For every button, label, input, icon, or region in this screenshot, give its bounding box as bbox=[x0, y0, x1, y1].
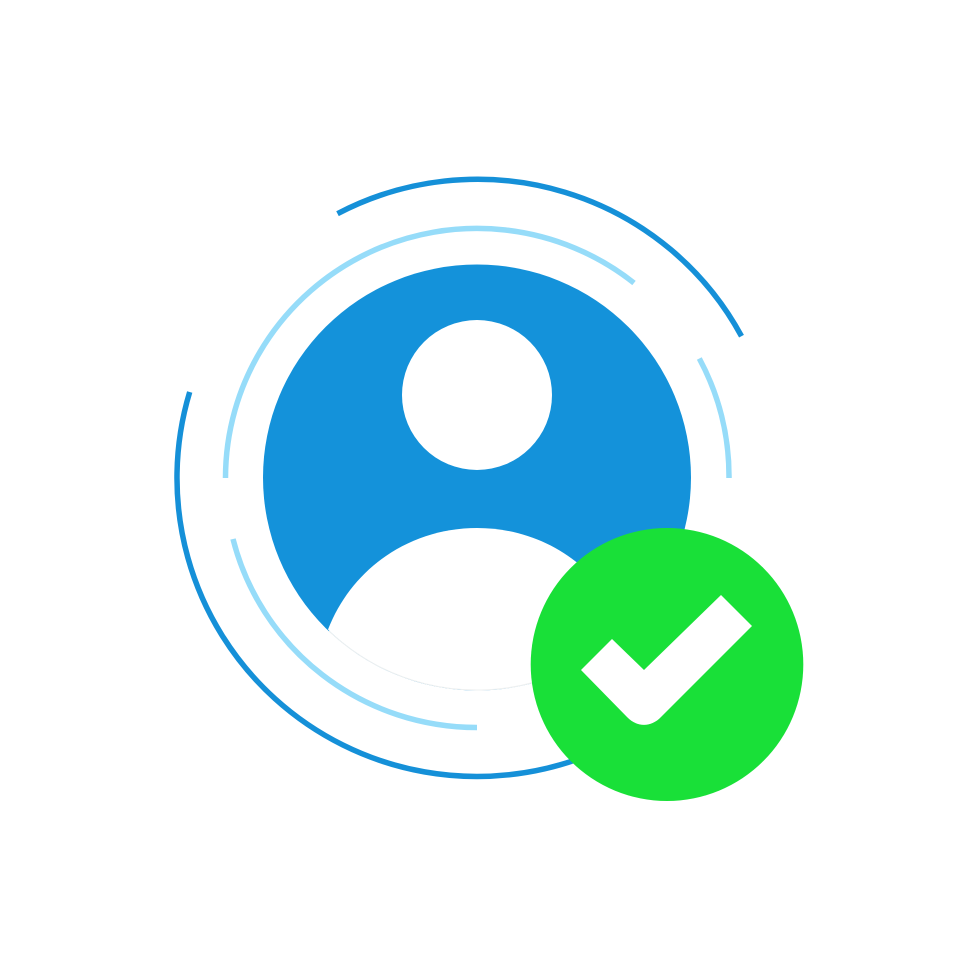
inner light blue arc: right bbox=[699, 358, 729, 478]
inner light blue arc: bottom left bbox=[233, 539, 477, 728]
outer dark blue arc: top right bbox=[338, 179, 742, 336]
check mark bbox=[581, 595, 752, 725]
avatar head bbox=[402, 320, 552, 470]
avatar body bbox=[328, 528, 627, 690]
avatar circle bbox=[263, 264, 691, 690]
outer dark blue arc: bottom left bbox=[177, 392, 590, 776]
faint outline under avatar body bbox=[329, 631, 535, 690]
verification badge bbox=[531, 528, 803, 801]
inner light blue arc: top bbox=[225, 228, 634, 478]
